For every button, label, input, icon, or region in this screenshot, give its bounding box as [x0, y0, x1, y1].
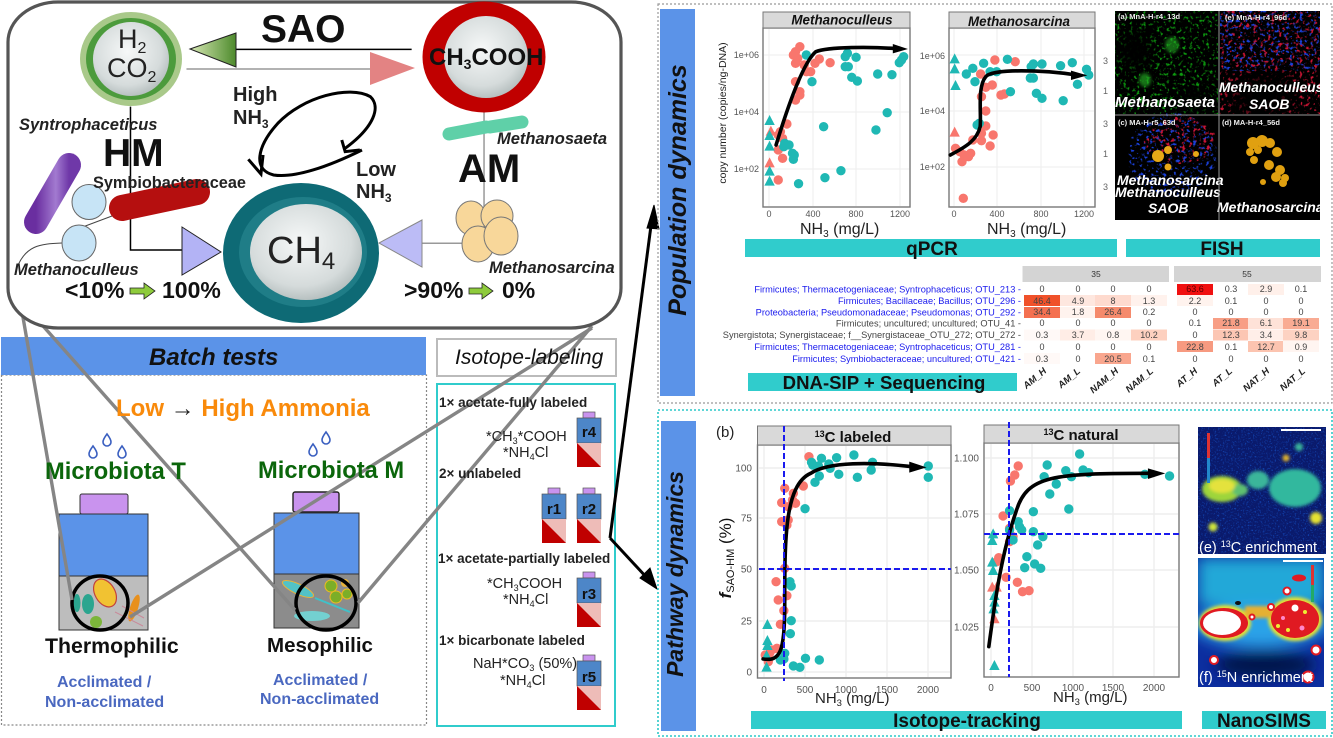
species labels c: Methanosarcina: [1117, 172, 1224, 188]
heatmap values: 26.4: [1104, 307, 1122, 317]
label: 0 percent: 0%: [502, 277, 535, 303]
x axis title: NH: [800, 221, 823, 238]
scatter points: [761, 455, 928, 672]
x axis title: 3: [837, 698, 842, 709]
node: acetate: [422, 2, 546, 112]
heatmap column labels: AM_H: [1020, 365, 1050, 392]
heatmap values: 0: [1263, 354, 1269, 364]
axis labels: 50: [741, 564, 752, 576]
icon: mesophilic bottle: [274, 492, 359, 630]
teal list frame: [437, 384, 615, 726]
stray axis digits: 3: [1103, 56, 1108, 66]
axis labels: 0: [746, 668, 752, 678]
formula: bicarbonate: 3: [529, 663, 534, 673]
icon: red rod: [122, 192, 197, 208]
arrowhead: hydrogenotrophic to methane: [182, 227, 221, 275]
x axis title: 3: [823, 229, 829, 240]
label: microbiota M: Microbiota M: [258, 458, 404, 484]
icon: Methanosaeta rod: [449, 122, 522, 134]
label: Methanosaeta: Methanosaeta: [497, 130, 607, 148]
reference lines: [759, 426, 951, 681]
bar: isotope-tracking: [751, 711, 1182, 732]
connector lines: bottle details to pathway box: [20, 300, 592, 617]
axis labels: 1500: [1102, 683, 1125, 694]
icon: bottle r1: r1: [547, 501, 561, 518]
axis labels: 1e+06: [734, 50, 759, 60]
formula: ammonium chloride: *NH: [503, 445, 530, 461]
heatmap facet 55: [1174, 266, 1321, 282]
heatmap values: 0.2: [1143, 307, 1155, 317]
label a: (a) MnA-H-r4_13d: [1118, 12, 1181, 21]
axis labels: 25: [741, 616, 752, 628]
heatmap values: 20.5: [1104, 354, 1122, 364]
heatmap column labels: AT_H: [1174, 365, 1201, 390]
species label e: Methanoculleus: [1219, 80, 1324, 95]
axis labels: 1e+02: [734, 164, 759, 174]
axis labels: [735, 464, 940, 696]
label: microbiota T: Microbiota T: [45, 459, 186, 485]
heatmap values: 0: [1146, 342, 1152, 352]
heatmap values: 0: [1075, 342, 1081, 352]
label: low NH3: NH: [356, 181, 385, 203]
chart: Methanosarcina qPCR: [920, 12, 1095, 240]
label d: (d) MA-H-r4_56d: [1222, 118, 1280, 127]
x axis title: (mg/L): [1016, 221, 1066, 238]
label: AM: AM: [458, 147, 520, 191]
heatmap values: 0.3: [1036, 330, 1048, 340]
label: Methanosarcina: Methanosarcina: [489, 259, 615, 277]
heatmap values: 63.6: [1186, 284, 1204, 294]
icon: bottle r3: [577, 572, 601, 627]
axis labels: 800: [848, 209, 864, 219]
stray axis digits: 1: [1103, 86, 1108, 96]
icon: ammonia loop arrow: [248, 92, 375, 176]
label: acclimated thermophilic: Acclimated /: [57, 674, 152, 691]
node: acetate: 3: [464, 56, 472, 72]
axis labels: 1.075: [954, 510, 979, 520]
axis labels: 2000: [1143, 683, 1166, 694]
heatmap values: 0.3: [1225, 284, 1237, 294]
heatmap values: 0: [1263, 307, 1269, 317]
icon: thermophilic bottle: [59, 494, 148, 630]
axis labels: 800: [1033, 209, 1049, 219]
label: Symbiobacteraceae: Symbiobacteraceae: [93, 174, 246, 192]
facet title: [949, 12, 1095, 29]
micrograph c: [1115, 113, 1224, 216]
heatmap cells: [1024, 284, 1319, 364]
axis labels: 2000: [917, 685, 940, 696]
facet title: 13: [815, 429, 825, 439]
micrograph d: [1217, 118, 1324, 215]
panel: isotope-labeling frames: [437, 339, 616, 726]
heatmap row labels: Firmicutes; Thermacetogeniaceae; Syntrophaceticus; OTU_281 -: [754, 342, 1021, 352]
icon: water drops mesophilic: [309, 432, 330, 456]
axis labels: 1200: [890, 209, 910, 219]
arrowhead: acetoclastic to methane: [379, 220, 422, 267]
species labels c: SAOB: [1148, 200, 1188, 216]
axis labels: 1.050: [954, 566, 979, 576]
axis labels: 1e+04: [734, 107, 759, 117]
icon: bottle r4: [577, 412, 601, 467]
axis labels: 400: [805, 209, 821, 219]
bar: qPCR: [745, 239, 1117, 260]
x axis title: NH: [815, 690, 837, 707]
heading: population dynamics: Population dynamics: [664, 64, 692, 316]
panel: pathway diagram box: [8, 2, 621, 328]
heatmap values: 0.9: [1295, 342, 1307, 352]
reference lines: [984, 422, 1179, 677]
heatmap values: 0.1: [1225, 296, 1237, 306]
formula: ammonium chloride 3: 4: [527, 680, 532, 690]
label: Methanoculleus: Methanoculleus: [14, 261, 139, 279]
x axis title: (mg/L): [829, 221, 879, 238]
heading: batch tests: Batch tests: [149, 344, 278, 371]
node: H2 CO2: 2: [148, 69, 156, 86]
facet title: [763, 12, 910, 28]
chart: 13C natural: [954, 422, 1179, 708]
label: HM: HM: [103, 132, 164, 175]
heatmap values: 0: [1298, 307, 1304, 317]
formula: ammonium chloride: Cl: [535, 445, 548, 461]
facet title: 13: [1043, 427, 1054, 437]
bar: FISH: [1126, 239, 1320, 260]
heatmap values: 0: [1039, 284, 1045, 294]
panel: population dynamics frame: [658, 4, 1332, 403]
axis labels: 0: [761, 685, 767, 696]
node: acetate: CH: [429, 44, 464, 71]
caption: 15N enrichment: N enrichment: [1227, 670, 1313, 686]
y axis title: f: [716, 590, 735, 598]
scale bar and color key: [1207, 429, 1321, 483]
heatmap values: 0.3: [1036, 354, 1048, 364]
heatmap facet 55: 55: [1242, 269, 1252, 279]
caption: 13C enrichment: (e): [1199, 540, 1217, 556]
scatter points: [764, 44, 908, 186]
icon: water drops thermophilic: [89, 434, 126, 458]
heatmap facet 35: [1022, 266, 1169, 282]
SAOB label e: SAOB: [1249, 96, 1289, 112]
label: hydrogenotrophic percentage: <10%: [65, 277, 124, 303]
species label a: Methanosaeta: [1115, 94, 1215, 111]
heatmap values: 0: [1192, 354, 1198, 364]
x axis title: 3: [1075, 697, 1080, 708]
pathway dynamics side bar: [661, 421, 696, 731]
formula: fully labeled acetate: 3: [513, 436, 518, 446]
facet title: Methanoculleus: [791, 12, 893, 28]
heatmap values: 0: [1146, 284, 1152, 294]
label: 100 percent: 100%: [162, 277, 221, 303]
formula: bicarbonate: (50%): [534, 656, 577, 672]
heatmap values: 22.8: [1186, 342, 1204, 352]
axis labels: 1e+06: [920, 51, 945, 61]
heatmap values: 0: [1075, 354, 1081, 364]
x axis title: (mg/L): [1080, 689, 1127, 706]
chart: 13C labeled: [716, 426, 951, 709]
panel: FISH micrographs: [1115, 11, 1324, 220]
heatmap column labels: NAT_L: [1278, 366, 1308, 394]
heatmap values: 0: [1298, 296, 1304, 306]
heatmap values: 8: [1110, 296, 1116, 306]
species labels c: Methanoculleus: [1115, 184, 1221, 200]
formula: fully labeled acetate: *CH: [486, 429, 513, 445]
formula: ammonium chloride 2: 4: [530, 599, 535, 609]
x axis title: 3: [1010, 229, 1016, 240]
panel: batch tests background: [1, 337, 426, 725]
node: H2 CO2: CO: [107, 53, 148, 83]
heatmap values: 0.1: [1225, 342, 1237, 352]
icon: blue cocci and flagella: [16, 184, 112, 270]
heatmap values: 9.8: [1295, 330, 1307, 340]
y axis title: copy number (copies/ng-DNA): [717, 42, 729, 184]
label: panel b: (b): [716, 424, 734, 441]
arrows: black up and down to dynamics panels: [610, 205, 659, 589]
heatmap values: 10.2: [1140, 330, 1158, 340]
heatmap column labels: NAM_H: [1088, 365, 1122, 396]
heatmap values: 0: [1110, 318, 1116, 328]
icon: bottle r5: r5: [582, 669, 596, 686]
heatmap column labels: NAT_H: [1241, 365, 1273, 394]
heatmap values: 46.4: [1033, 296, 1051, 306]
heatmap row labels: Proteobacteria; Pseudomonadaceae; Pseudomonas; OTU_292 -: [756, 308, 1021, 318]
axis labels: 1000: [1062, 683, 1085, 694]
icon: bottle r5: [577, 655, 601, 710]
label c: (c) MA-H-r5_63d: [1118, 118, 1176, 127]
heatmap values: 4.9: [1072, 296, 1084, 306]
label: Syntrophaceticus: Syntrophaceticus: [19, 116, 157, 134]
formula: ammonium chloride 2: *NH: [503, 592, 530, 608]
x axis title: (mg/L): [842, 690, 889, 707]
heatmap values: 0: [1228, 354, 1234, 364]
label: acclimated thermophilic: Non-acclimated: [45, 694, 164, 711]
scatter points: [987, 454, 1170, 670]
heatmap values: 1.8: [1072, 307, 1084, 317]
formula: bicarbonate: NaH*CO: [473, 656, 529, 672]
heatmap values: 0: [1263, 296, 1269, 306]
label: mesophilic: Mesophilic: [267, 634, 373, 657]
icon: green arrow acetoclastic: [469, 283, 493, 299]
x axis title: NH: [987, 221, 1010, 238]
label: SAO: SAO: [261, 8, 346, 51]
heatmap values: 0: [1039, 342, 1045, 352]
icon: Methanosarcina cluster: [456, 200, 518, 262]
bar: FISH: FISH: [1200, 239, 1244, 260]
axis labels: 1500: [876, 685, 899, 696]
label: thermophilic: Thermophilic: [45, 634, 179, 658]
axis labels: 500: [1024, 683, 1041, 694]
label: acclimated mesophilic: Acclimated /: [273, 672, 368, 689]
heatmap values: 1.3: [1143, 296, 1155, 306]
label: high NH3: NH: [233, 107, 262, 129]
axis labels: [954, 454, 1166, 694]
heatmap values: 0: [1192, 307, 1198, 317]
heading: isotope-labeling: Isotope-labeling: [455, 346, 604, 369]
axis labels: 1.025: [954, 622, 979, 634]
icon: bottle r2: [577, 488, 601, 543]
heatmap values: 21.8: [1222, 318, 1240, 328]
y axis title: (%): [716, 518, 735, 549]
label: low NH3: 3: [385, 191, 392, 205]
heatmap values: 0: [1110, 284, 1116, 294]
icon: bottle r3: r3: [582, 586, 596, 603]
label e: (e) MnA-H-r4_96d: [1225, 13, 1288, 22]
heatmap row labels: Firmicutes; Symbiobacteraceae; uncultured; OTU_421 -: [792, 354, 1021, 364]
formula: partially labeled acetate: *CH: [487, 576, 514, 592]
axis labels: 100: [735, 464, 752, 474]
caption: 13C enrichment: C enrichment: [1231, 540, 1317, 556]
stray axis digits: 3: [1103, 119, 1108, 129]
heatmap values: 6.1: [1260, 318, 1272, 328]
heatmap values: 0: [1146, 318, 1152, 328]
micrograph e: [1219, 11, 1324, 117]
item: bicarbonate labeled: 1× bicarbonate labeled: [439, 633, 585, 648]
bar: DNA-SIP plus sequencing: DNA-SIP + Sequencing: [783, 372, 985, 393]
panel: pathway dynamics frame: [658, 410, 1332, 736]
heatmap values: 0: [1110, 342, 1116, 352]
heatmap values: 0.1: [1295, 284, 1307, 294]
item: fully labeled: 1× acetate-fully labeled: [439, 395, 587, 410]
formula: ammonium chloride 3: *NH: [500, 673, 527, 689]
arrowhead: green to H2: [190, 33, 236, 67]
axis labels: 0: [951, 209, 957, 219]
heatmap values: 2.9: [1260, 284, 1272, 294]
formula: ammonium chloride 2: Cl: [535, 592, 548, 608]
node: H2 CO2: [80, 12, 182, 106]
scatter points: [949, 53, 1089, 198]
item: partially labeled: 1× acetate-partially labeled: [438, 551, 610, 566]
facet title: C natural: [1054, 427, 1119, 444]
icon: bottle r2: r2: [582, 501, 596, 518]
micrograph a: [1115, 11, 1218, 114]
facet title: Methanosarcina: [968, 14, 1071, 29]
axis labels: 500: [797, 685, 814, 696]
label: acetoclastic percentage: >90%: [404, 277, 463, 303]
formula: partially labeled acetate: COOH: [519, 576, 562, 592]
caption: 15N enrichment: 15: [1217, 669, 1227, 679]
axis labels: [734, 50, 910, 219]
isotope list: [438, 395, 610, 710]
heatmap column labels: [1020, 365, 1308, 396]
heatmap column labels: AT_L: [1209, 366, 1235, 390]
heading: pathway dynamics: Pathway dynamics: [662, 471, 688, 677]
axis labels: 0: [766, 209, 772, 219]
item: unlabeled: 2× unlabeled: [439, 466, 521, 481]
scale bar and color key: [1283, 560, 1323, 602]
heatmap values: 0.1: [1189, 318, 1201, 328]
facet title: C labeled: [825, 429, 891, 446]
axis labels: 1e+02: [920, 162, 945, 172]
label: low NH3: Low: [356, 159, 396, 181]
label: high NH3: 3: [262, 117, 269, 131]
icon: bottle r1: [542, 488, 566, 543]
label: low to high ammonia: Low → High Ammonia: [116, 395, 370, 422]
formula: fully labeled acetate: *COOH: [518, 429, 567, 445]
arrowhead: pink to acetate: [370, 52, 415, 85]
heatmap column labels: AM_L: [1055, 366, 1083, 392]
heatmap values: 34.4: [1033, 307, 1051, 317]
node: acetate: COOH: [471, 44, 543, 71]
bar: qPCR: qPCR: [906, 239, 958, 260]
heatmap values: 12.3: [1222, 330, 1240, 340]
heatmap values: 0: [1298, 354, 1304, 364]
formula: ammonium chloride: 4: [530, 452, 535, 462]
icon: green arrow hydrogenotrophic: [130, 283, 155, 299]
heatmap values: 12.7: [1257, 342, 1275, 352]
axis labels: 400: [989, 209, 1005, 219]
formula: ammonium chloride 3: Cl: [532, 673, 545, 689]
chart: DNA-SIP heatmap: [723, 266, 1321, 396]
heatmap values: 0: [1039, 318, 1045, 328]
stray axis digits: 3: [1103, 182, 1108, 192]
image: NanoSIMS 15N enrichment: [1192, 558, 1328, 687]
heatmap column labels: NAM_L: [1124, 366, 1156, 395]
batch tests header bar: [1, 337, 426, 375]
axis labels: 1000: [835, 685, 858, 696]
heatmap values: 3.7: [1072, 330, 1084, 340]
heatmap values: 0: [1075, 318, 1081, 328]
node: methane: CH: [267, 230, 322, 272]
heatmap values: 0.1: [1143, 354, 1155, 364]
label: high NH3: High: [233, 84, 277, 106]
connector lines in pathway: [130, 49, 484, 250]
axis labels: [920, 51, 1094, 219]
stray axis digits: 1: [1103, 149, 1108, 159]
heatmap values: 2.2: [1189, 296, 1201, 306]
axis labels: 1e+04: [920, 106, 945, 116]
heatmap values: 0: [1192, 330, 1198, 340]
node: methane: [223, 183, 379, 323]
species label d: Methanosarcina: [1217, 199, 1324, 215]
axis labels: 75: [741, 514, 752, 524]
heatmap row labels: [723, 284, 1021, 364]
axis labels: 1.100: [954, 454, 979, 464]
stray axis digits: [1103, 56, 1108, 192]
icon: bottle r4: r4: [582, 424, 597, 441]
heatmap values: 0: [1075, 284, 1081, 294]
node: methane: 4: [322, 248, 335, 275]
caption: 13C enrichment: 13: [1221, 539, 1231, 549]
heatmap row labels: Synergistota; Synergistaceae; f__Synergistaceae_OTU_272; OTU_272 -: [723, 330, 1021, 340]
axis labels: 1200: [1074, 209, 1094, 219]
y axis title: SAO-HM: [725, 549, 737, 593]
heatmap values: 0.8: [1107, 330, 1119, 340]
heatmap row labels: Firmicutes; Thermacetogeniaceae; Syntrophaceticus; OTU_213 -: [754, 284, 1021, 294]
population dynamics side bar: [660, 9, 695, 396]
heatmap row labels: Firmicutes; Bacillaceae; Bacillus; OTU_296 -: [838, 296, 1021, 306]
icon: purple rod: [36, 165, 69, 222]
node: H2 CO2: 2: [138, 40, 146, 57]
heatmap values: 19.1: [1292, 318, 1310, 328]
heatmap values: 3.4: [1260, 330, 1272, 340]
facet title: [758, 426, 951, 446]
heatmap facet 35: 35: [1091, 269, 1101, 279]
heatmap values: 0: [1228, 307, 1234, 317]
heatmap values: [1033, 284, 1310, 364]
bar: NanoSIMS: NanoSIMS: [1217, 711, 1311, 732]
formula: partially labeled acetate: 3: [514, 583, 519, 593]
chart: Methanoculleus qPCR: [717, 12, 910, 240]
heatmap row labels: Firmicutes; uncultured; uncultured; OTU_41 -: [836, 318, 1021, 328]
facet title: [984, 425, 1179, 444]
image separators: [1115, 11, 1320, 220]
axis labels: 0: [988, 683, 994, 694]
caption: 15N enrichment: (f): [1199, 670, 1213, 686]
x axis title: NH: [1053, 689, 1075, 706]
image: NanoSIMS 13C enrichment: [1198, 427, 1326, 556]
node: H2 CO2: H: [118, 24, 138, 54]
bar: isotope-tracking: Isotope-tracking: [893, 711, 1041, 732]
label: acclimated mesophilic: Non-acclimated: [260, 691, 379, 708]
